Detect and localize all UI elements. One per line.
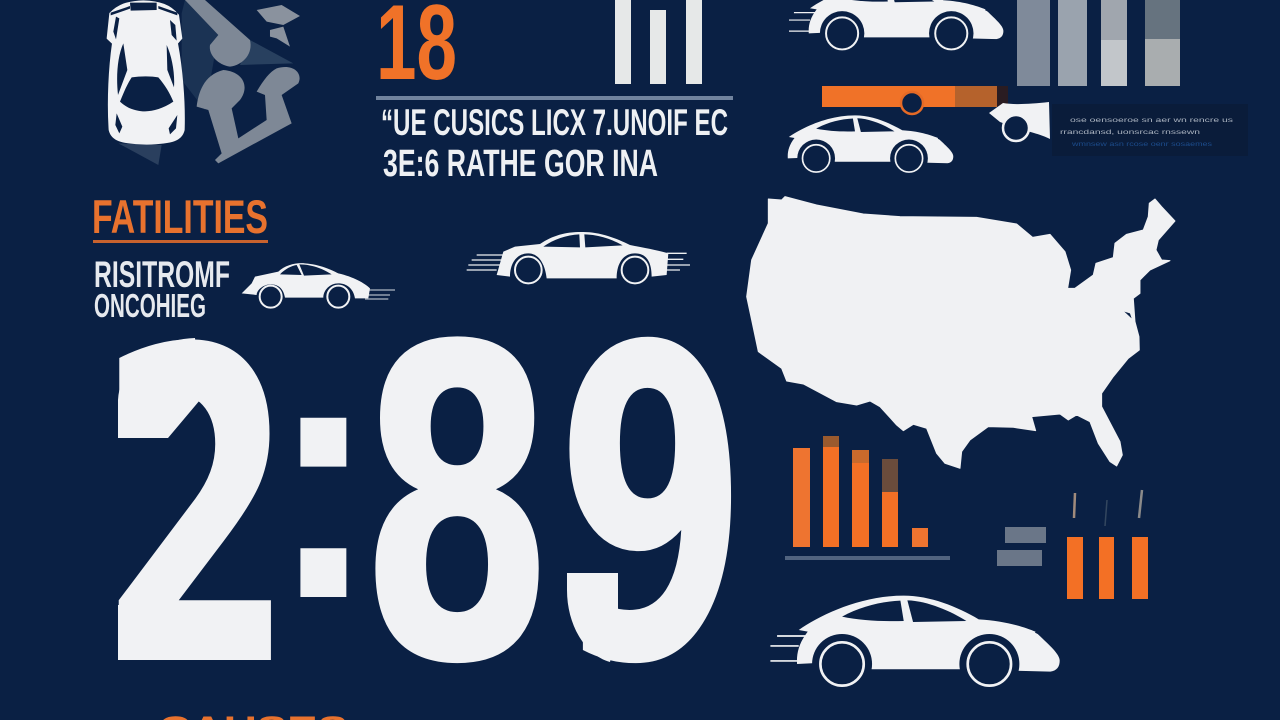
text block: distorted caption <box>381 102 728 185</box>
caption line 2: 3E:6 RATHE GOR INA <box>383 143 658 185</box>
icon: large fast car bottom right <box>770 596 1064 695</box>
bar chart: white bars top center <box>615 0 702 84</box>
left caption line 2: ONCOHIEG <box>94 287 206 324</box>
text block: small caption panel: ose oensoeroe sn aer wn rencre us <box>1070 117 1234 124</box>
bar chart: orange bars with thin marks and gray legend <box>997 490 1148 599</box>
icon: sedan middle right <box>786 115 956 178</box>
icon: fast car center <box>467 232 690 283</box>
text block: small caption panel: rrancdansd, uonsrcac rnssewn <box>1060 129 1201 136</box>
text block: left caption <box>94 254 230 324</box>
text block: small caption panel: wmnsew asn rcose oenr sosaemes <box>1071 141 1213 148</box>
bar chart: gray bars top right <box>1017 0 1180 86</box>
icon: fast car top <box>789 0 1006 57</box>
text block: small caption panel <box>1052 104 1248 156</box>
heading: fatilities: FATILITIES <box>92 190 268 243</box>
orange bar with ring <box>822 86 1008 114</box>
bar chart: orange bars <box>785 436 950 560</box>
big number <box>96 256 749 720</box>
big number: : <box>269 276 378 673</box>
caption line 1: “UE CUSICS LICX 7.UNOIF EC <box>381 102 728 143</box>
divider rule under stat <box>376 96 733 100</box>
left caption line 1: RISITROMF <box>94 254 230 295</box>
icon: top-view car with gray shadow shapes <box>107 0 300 165</box>
icon: cropped car fragment <box>989 102 1050 141</box>
icon: small car facing left <box>242 263 395 308</box>
map: contiguous United States <box>747 197 1175 468</box>
